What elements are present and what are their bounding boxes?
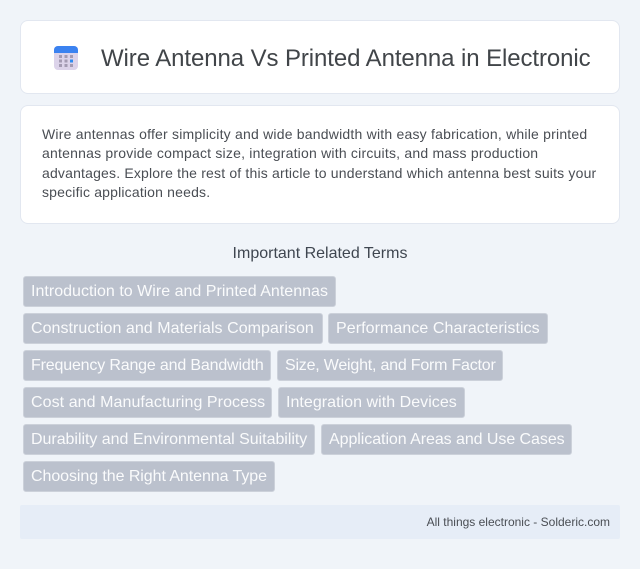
- tag: Size, Weight, and Form Factor: [285, 357, 496, 374]
- intro paragraph: specific application needs.: [42, 184, 210, 200]
- tag: [278, 387, 465, 418]
- tag: Introduction to Wire and Printed Antennas: [31, 283, 328, 300]
- tag: Durability and Environmental Suitability: [31, 431, 307, 448]
- tag: Application Areas and Use Cases: [329, 431, 565, 448]
- intro text panel: [20, 105, 620, 224]
- intro paragraph: [42, 126, 596, 200]
- tag: Performance Characteristics: [336, 320, 540, 337]
- tag: [23, 350, 271, 381]
- tag: Choosing the Right Antenna Type: [31, 468, 267, 485]
- title: Wire Antenna Vs Printed Antenna in Electronic: [101, 45, 591, 72]
- header panel: [20, 20, 620, 94]
- tag: [23, 387, 272, 418]
- tag: Integration with Devices: [286, 394, 457, 411]
- tag: [23, 461, 275, 492]
- intro paragraph: antennas provide compact size, integration with circuits, and mass production: [42, 145, 538, 161]
- tag: Cost and Manufacturing Process: [31, 394, 265, 411]
- tag: [23, 313, 323, 344]
- footer credit: All things electronic - Solderic.com: [427, 515, 610, 529]
- footer bar: [20, 505, 620, 539]
- tag: Construction and Materials Comparison: [31, 320, 314, 337]
- icon: calendar: [54, 46, 78, 70]
- related terms heading: Important Related Terms: [233, 245, 407, 262]
- tag: [277, 350, 503, 381]
- intro paragraph: advantages. Explore the rest of this article to understand which antenna best suits your: [42, 165, 596, 181]
- tag: [23, 276, 336, 307]
- tag: Frequency Range and Bandwidth: [31, 357, 264, 374]
- tag: [328, 313, 548, 344]
- tag: [321, 424, 572, 455]
- tag: [23, 424, 315, 455]
- related terms tags: [23, 276, 572, 492]
- intro paragraph: Wire antennas offer simplicity and wide bandwidth with easy fabrication, while printed: [42, 126, 587, 142]
